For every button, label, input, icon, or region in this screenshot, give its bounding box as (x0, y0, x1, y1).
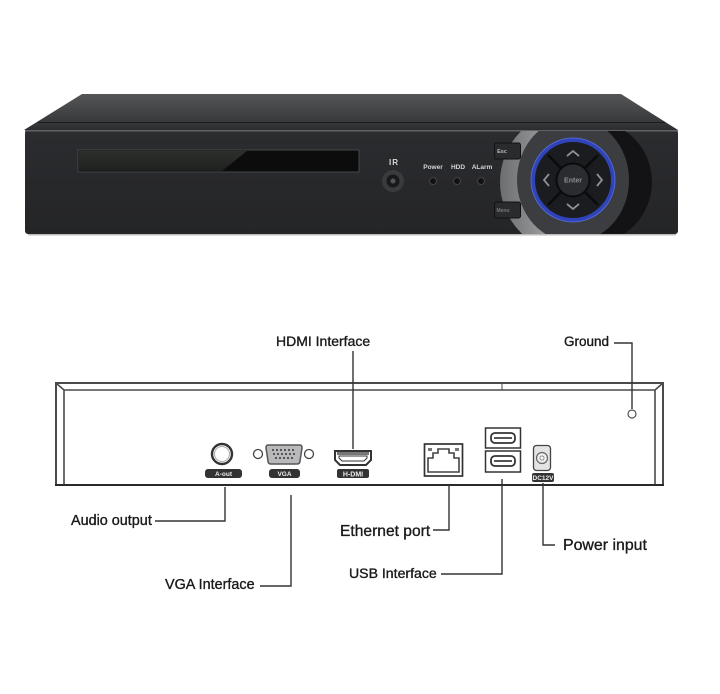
port: Ethernet (424, 444, 462, 476)
status indicators: ALarm (472, 164, 493, 171)
button: Esc: Esc (497, 149, 507, 155)
port: DC 12V (532, 446, 554, 482)
button: Esc (494, 143, 520, 159)
callout: HDMI Interface (276, 333, 370, 449)
callout: VGA Interface: VGA Interface (165, 577, 255, 593)
callout: HDMI Interface: HDMI Interface (276, 333, 370, 349)
callout: VGA Interface (165, 495, 291, 593)
ground screw (628, 410, 636, 418)
navigation wheel with blue ring: Enter (564, 178, 582, 184)
callout: USB Interface (349, 479, 502, 581)
front view of recorder (24, 94, 678, 236)
callout: Ground: Ground (564, 334, 609, 349)
IR receiver (382, 158, 404, 192)
callout: Audio output (71, 487, 225, 529)
infographic: NVR front and rear interface diagram (24, 94, 678, 590)
button: Menu: Menu (496, 208, 510, 214)
port: VGA: VGA (277, 471, 292, 478)
button: Menu (494, 202, 520, 218)
callout: Power input: Power input (563, 537, 647, 554)
port: USB stacked (486, 428, 520, 472)
port: VGA (254, 445, 314, 478)
status indicators: HDD (451, 164, 465, 171)
IR receiver: IR (389, 158, 399, 167)
display window (78, 150, 359, 172)
control panel swoosh (500, 131, 652, 234)
rear panel outline (55, 383, 664, 485)
front panel (25, 130, 678, 236)
callout: Ethernet port (340, 485, 449, 540)
status indicators (423, 164, 493, 184)
chassis top (24, 94, 678, 130)
callout: Power input (543, 483, 647, 554)
callout: Ground (564, 334, 632, 409)
port: audio out: A-out (215, 471, 233, 478)
port: HDMI: H-DMI (343, 472, 363, 478)
callout: USB Interface: USB Interface (349, 565, 437, 581)
callout: Ethernet port: Ethernet port (340, 523, 431, 540)
navigation wheel with blue ring (531, 138, 615, 222)
port: HDMI (335, 451, 371, 478)
callout: Audio output: Audio output (71, 513, 152, 529)
port: audio out (205, 444, 242, 478)
status indicators: Power (423, 164, 443, 171)
port: DC 12V: DC12V (533, 475, 554, 482)
